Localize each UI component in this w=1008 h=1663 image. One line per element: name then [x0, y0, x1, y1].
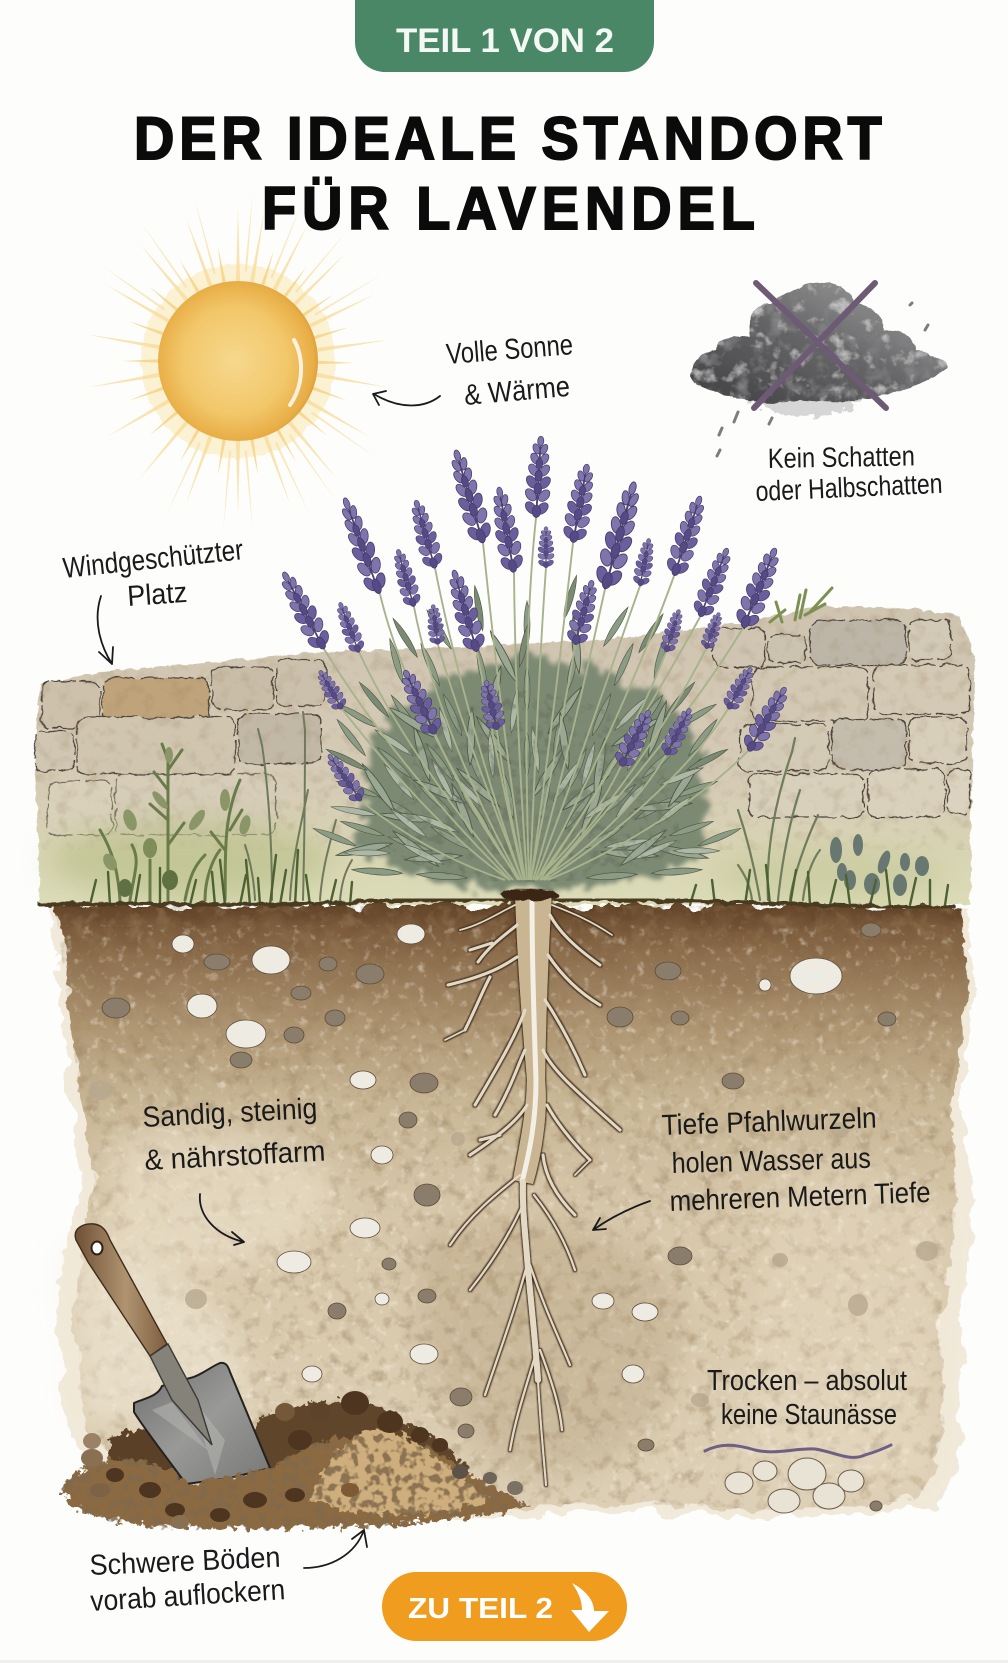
label: Volle Sonne: Volle Sonne	[445, 329, 574, 371]
label: Sandig, steinig: Sandig, steinig	[142, 1093, 318, 1134]
label: Sandig, steinig	[142, 1093, 326, 1177]
shovel and dirt mound	[62, 1224, 530, 1529]
leaf mass	[356, 658, 712, 888]
root crown	[500, 889, 560, 901]
arrow: to wall	[98, 596, 113, 664]
label: Sandig, steinig: & nährstoffarm	[144, 1136, 326, 1177]
label: Tiefe Pfahlwurzeln: holen Wasser aus	[671, 1143, 871, 1180]
dirt behind shovel	[110, 1401, 470, 1500]
arrow: to roots	[593, 1201, 650, 1230]
grass left	[50, 712, 352, 905]
dirt mound	[62, 1391, 530, 1529]
wall stones right	[713, 620, 970, 817]
lavender plant	[271, 435, 797, 901]
wall stones left	[35, 660, 326, 835]
shovel blade	[134, 1363, 270, 1484]
dry pebbles	[725, 1458, 882, 1513]
icon: sun	[88, 194, 389, 528]
taproot	[513, 890, 552, 1184]
leaf shadows	[385, 690, 684, 882]
button: zu Teil 2	[382, 1572, 627, 1641]
badge: Teil 1 von 2	[355, 0, 654, 72]
label: Tiefe Pfahlwurzeln: mehreren Metern Tiefe	[669, 1177, 931, 1218]
arrow: to mound	[304, 1530, 367, 1568]
label: Windgeschützter Platz: Windgeschützter	[61, 534, 245, 585]
label: Trocken: Trocken – absolut	[707, 1365, 907, 1397]
pebbles	[88, 923, 938, 1451]
label: Kein Schatten: Kein Schatten	[768, 440, 915, 474]
title	[134, 106, 882, 242]
label: Windgeschützter Platz	[61, 534, 245, 613]
arrow: to sun	[373, 391, 440, 406]
label: Tiefe Pfahlwurzeln	[661, 1103, 931, 1218]
roots	[445, 890, 620, 1485]
leaves	[312, 575, 742, 881]
soil	[50, 905, 975, 1520]
label: Volle Sonne	[445, 329, 574, 412]
label: Schwere Böden: Schwere Böden	[89, 1542, 281, 1582]
label: Trocken	[707, 1365, 907, 1431]
button: zu Teil 2: ZU TEIL 2	[408, 1593, 553, 1625]
flower spikes	[271, 435, 797, 807]
title: DER IDEALE STANDORT	[134, 106, 882, 172]
label: Schwere Böden: vorab auflockern	[89, 1574, 286, 1618]
icon: cloud crossed out	[690, 282, 948, 456]
tuft on wall	[770, 588, 832, 622]
shovel neck	[150, 1344, 212, 1445]
ground line	[38, 899, 955, 908]
icon: down arrow	[571, 1583, 609, 1632]
title: FÜR LAVENDEL	[262, 176, 755, 242]
label: Kein Schatten	[755, 440, 943, 507]
bottom strip	[0, 1660, 1008, 1663]
label: Windgeschützter Platz: Platz	[126, 577, 188, 613]
grass right	[690, 738, 950, 905]
badge: Teil 1 von 2: TEIL 1 VON 2	[396, 22, 614, 60]
label: Trocken: keine Staunässe	[721, 1399, 897, 1431]
label: Schwere Böden	[89, 1542, 286, 1618]
label: Tiefe Pfahlwurzeln: Tiefe Pfahlwurzeln	[661, 1103, 877, 1142]
label: Kein Schatten: oder Halbschatten	[755, 468, 943, 507]
stems	[324, 518, 748, 880]
label: Volle Sonne: & Wärme	[463, 371, 571, 412]
stone wall	[35, 606, 975, 905]
wavy line	[705, 1445, 891, 1457]
shovel handle	[75, 1224, 167, 1356]
arrow: to sandy soil	[200, 1194, 244, 1245]
